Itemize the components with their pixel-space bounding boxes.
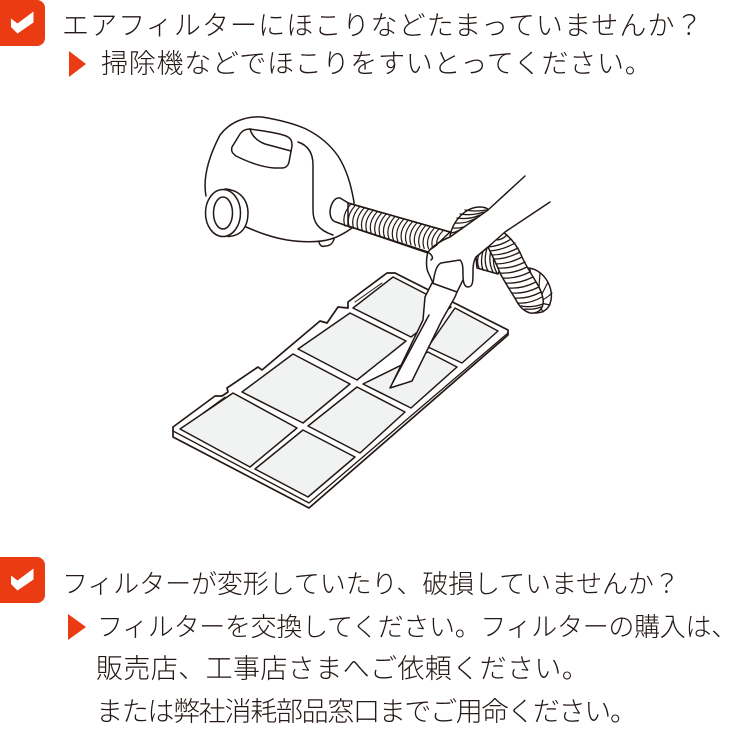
hose front [344, 203, 450, 253]
text: vacuum instruction: 掃除機などでほこりをすいとってください。 [101, 49, 652, 79]
hose behind hand [450, 207, 552, 313]
hand [426, 176, 550, 292]
icon: check mark 1 [0, 0, 45, 46]
hose connector [330, 198, 350, 227]
text: parts contact instruction: または弊社消耗部品窓口までご用命ください。 [96, 697, 636, 727]
vacuum body [205, 117, 354, 246]
heading: deformed filter check: フィルターが変形していたり、破損していませんか？ [62, 569, 680, 599]
filter [173, 273, 508, 508]
nozzle [390, 283, 457, 388]
text: dealer instruction: 販売店、工事店さまへご依頼ください。 [96, 654, 589, 684]
heading: air filter check: エアフィルターにほこりなどたまっていませんか？ [62, 11, 704, 41]
icon: arrow 2 [68, 614, 86, 640]
vacuum wheel [206, 189, 248, 236]
icon: arrow 1 [69, 51, 86, 77]
icon: check mark 2 [0, 557, 45, 603]
text: replacement instruction: フィルターを交換してください。フィルターの購入は、 [97, 612, 737, 642]
